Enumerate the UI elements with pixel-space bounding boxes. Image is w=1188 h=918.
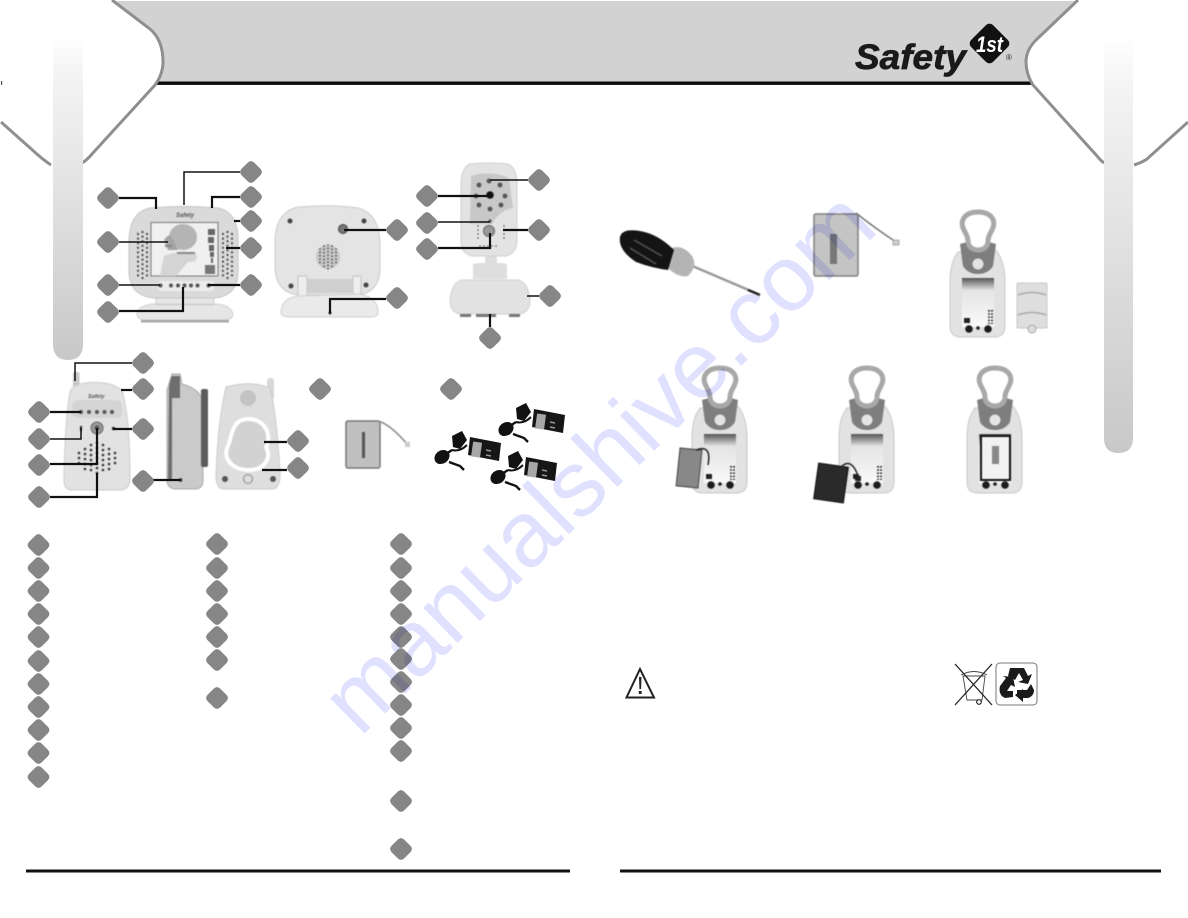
monitor body	[129, 206, 238, 298]
battery pack, left page	[346, 421, 410, 468]
right page grey side bar	[1104, 35, 1133, 453]
Safety 1st logo	[855, 22, 1012, 77]
monitor buttons	[158, 284, 210, 288]
adapter 1	[432, 431, 501, 470]
battery holder with cover removed	[950, 212, 1047, 337]
camera unit	[450, 163, 530, 317]
parent unit front view	[64, 372, 130, 490]
battery cover	[1017, 283, 1047, 333]
battery inserted step	[967, 368, 1022, 493]
bottom rule: right page	[620, 870, 1161, 872]
Safety 1st logo: Safety	[855, 38, 968, 77]
watermark: manualshive.com	[301, 170, 894, 752]
left page corner tab	[0, 0, 163, 165]
rear speaker	[316, 245, 340, 269]
screwdriver	[620, 230, 760, 295]
header band	[112, 1, 1078, 85]
monitor screen with sleeping baby	[151, 222, 218, 276]
parent unit side view	[167, 374, 208, 489]
unit buttons	[79, 410, 115, 431]
monitor front view	[129, 206, 238, 322]
camera LEDs and lens	[474, 179, 507, 223]
Safety 1st logo: ®	[1006, 53, 1012, 62]
Safety 1st logo: 1st	[976, 32, 1004, 57]
monitor back view	[275, 206, 380, 317]
monitor stand	[137, 297, 233, 320]
parent unit back view	[216, 378, 280, 489]
adapter 3	[488, 451, 557, 490]
leader lines	[50, 172, 539, 497]
parent unit front view: Safety	[88, 394, 105, 400]
camera base	[450, 280, 530, 314]
left page grey side bar	[53, 35, 83, 360]
icon: recycling symbol	[996, 663, 1037, 705]
rear stand	[298, 276, 361, 296]
icon: warning triangle	[626, 669, 654, 698]
bottom rule: left page	[26, 870, 570, 872]
parts list markers: column 2	[206, 533, 228, 709]
monitor front view: Safety	[176, 213, 195, 219]
battery connecting step	[676, 368, 747, 493]
adapter 2	[496, 403, 565, 442]
AC adapters	[432, 403, 565, 490]
parts list markers: column 3	[390, 533, 412, 860]
right page corner tab	[1026, 0, 1188, 165]
replacement battery	[814, 213, 899, 276]
camera body	[461, 163, 517, 256]
battery connected step	[814, 368, 894, 503]
parts list markers: column 1	[28, 534, 49, 788]
callout markers	[28, 161, 561, 508]
icon: crossed-out wheelie bin	[955, 664, 992, 705]
unit speaker	[79, 443, 115, 477]
monitor speaker grilles	[138, 232, 232, 280]
